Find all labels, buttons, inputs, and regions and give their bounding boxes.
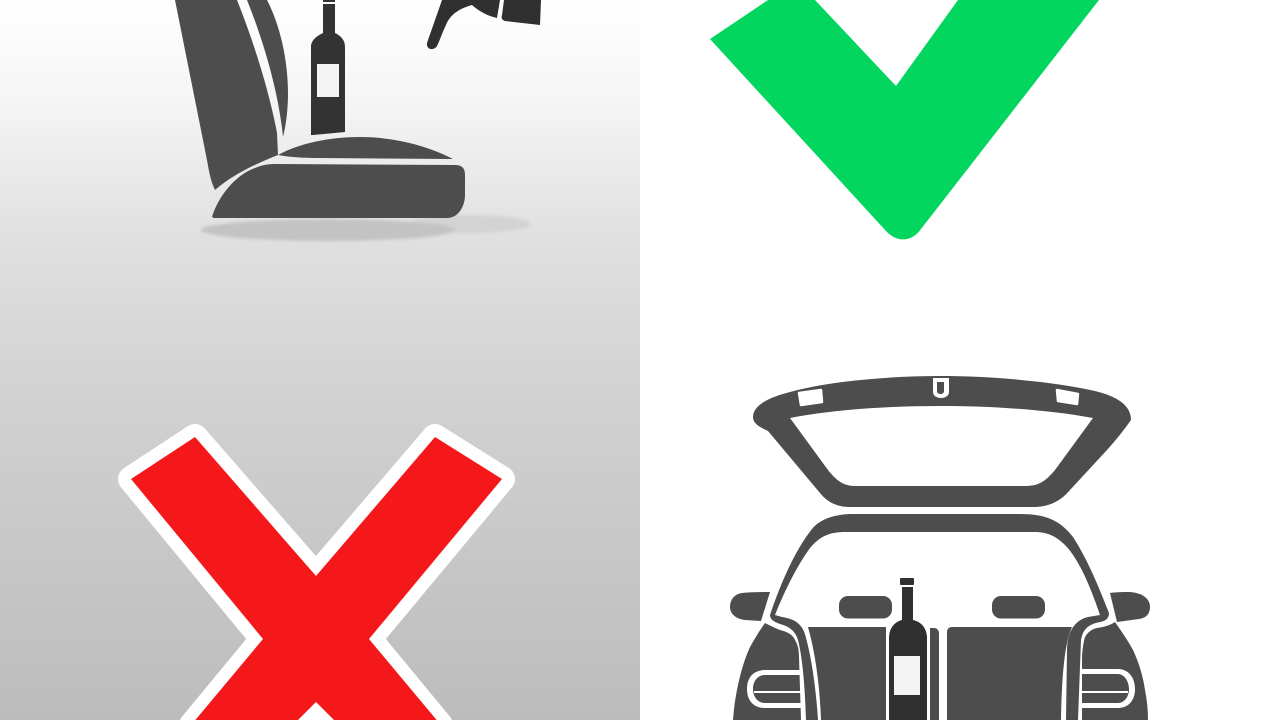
rear seat left xyxy=(808,627,886,720)
center console xyxy=(930,628,939,720)
seat cushion xyxy=(212,164,465,218)
icon: open car trunk with bottle xyxy=(730,376,1150,720)
rear seat right xyxy=(947,627,1072,720)
icon: red cross xyxy=(131,437,502,720)
trunk lid details xyxy=(799,390,822,405)
icon: wine bottle on seat xyxy=(311,0,345,135)
panel: left gradient background xyxy=(0,0,640,720)
seat cushion top xyxy=(278,137,453,159)
right tail light xyxy=(1081,669,1135,708)
white notch at bottom of cross xyxy=(286,702,346,720)
roof and pillar band xyxy=(770,514,1109,720)
left mirror xyxy=(730,592,770,621)
left body panel xyxy=(733,623,801,720)
seat backrest xyxy=(175,0,278,190)
headrest right xyxy=(992,596,1045,618)
icon: car seat xyxy=(175,0,465,218)
bottle label xyxy=(894,656,920,695)
right body panel xyxy=(1082,622,1148,720)
left tail light xyxy=(747,670,802,708)
bottle label xyxy=(317,64,339,97)
icon: green check mark xyxy=(710,0,1099,239)
icon: seat shadow xyxy=(201,215,531,241)
panel: right white background xyxy=(640,0,1280,720)
right mirror xyxy=(1110,592,1150,622)
headrest left xyxy=(839,596,892,618)
bottle xyxy=(889,578,927,720)
icon: seat belt buckle xyxy=(427,0,541,49)
trunk lid xyxy=(753,376,1131,507)
seat side bolster xyxy=(247,0,288,137)
